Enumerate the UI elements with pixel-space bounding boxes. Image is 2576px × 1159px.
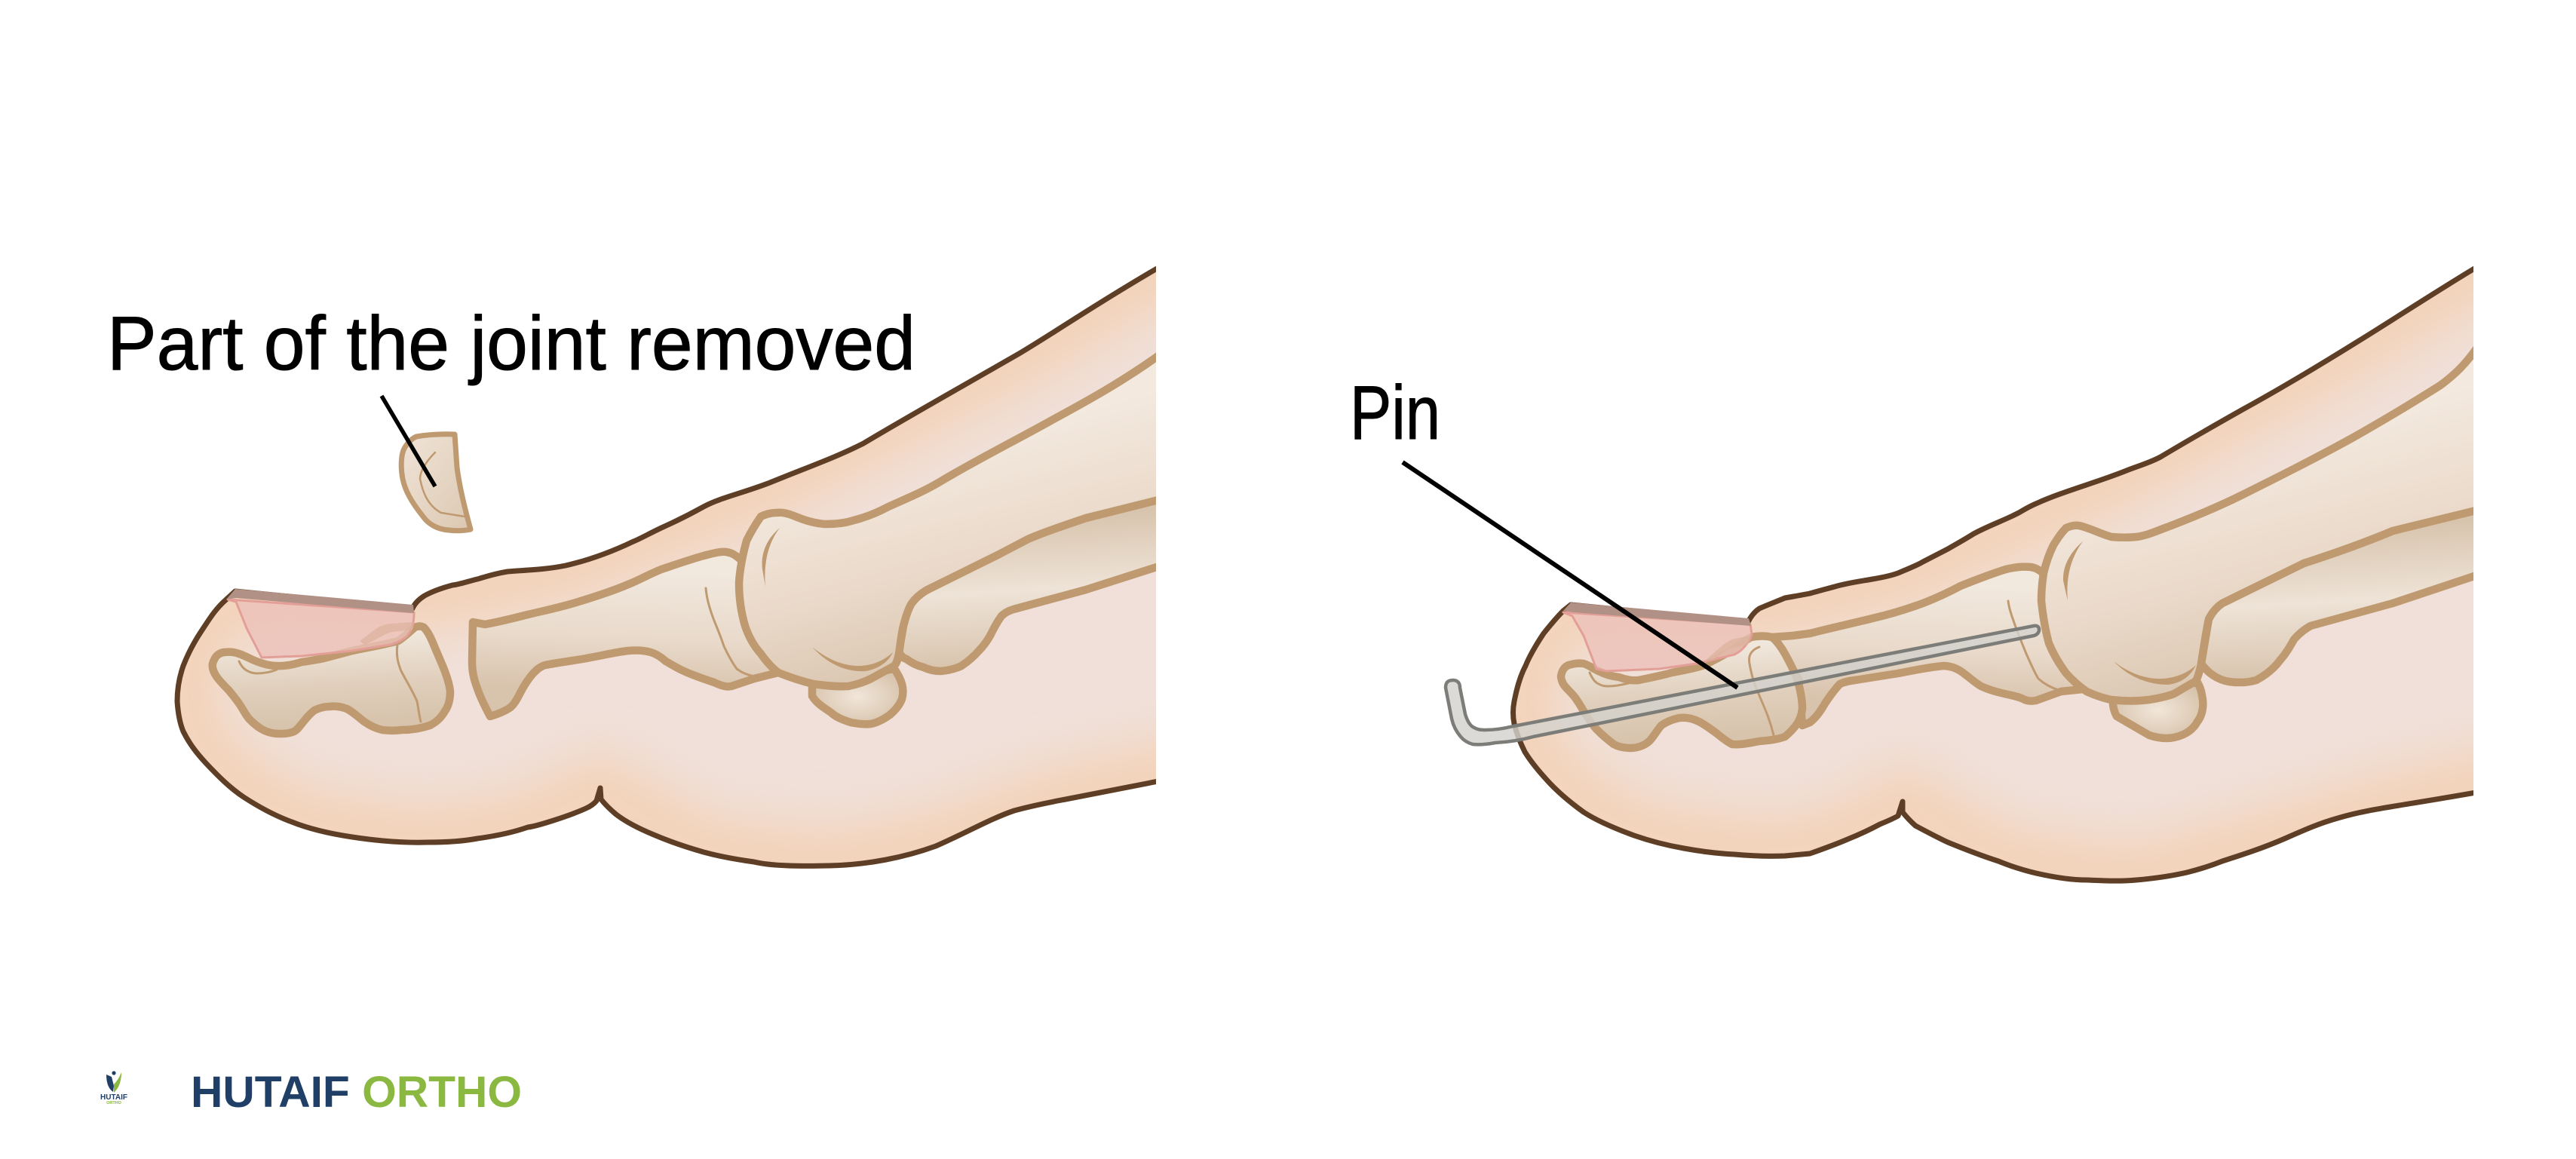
nail — [1563, 612, 1752, 671]
metatarsal head and shaft — [2041, 345, 2479, 701]
leader line: pin label — [1403, 462, 1737, 688]
distal phalanx details — [239, 645, 421, 722]
distal phalanx details — [1590, 647, 1774, 735]
brand name: Hutaif Ortho: HUTAIF ORTHO — [191, 1068, 522, 1117]
metatarsal head details — [2063, 541, 2196, 685]
sesamoid bone — [2113, 682, 2203, 738]
bone fragment: removed part of the joint — [401, 434, 471, 531]
sesamoid bone — [812, 669, 903, 724]
skin: left toe — [175, 265, 1156, 869]
lower metatarsal shaft — [2201, 510, 2479, 682]
logo icon: Hutaif Ortho mark: ORTHO — [106, 1101, 122, 1105]
logo icon: Hutaif Ortho mark: HUTAIF — [100, 1093, 127, 1102]
proximal phalanx — [1772, 567, 2096, 725]
illustration: right foot with pin — [1443, 265, 2473, 884]
nail inner fold — [1704, 636, 1750, 661]
surgical pin — [1446, 626, 2039, 744]
proximal phalanx joint line — [706, 588, 754, 676]
leader line: removed part label — [382, 396, 435, 486]
nail inner fold — [360, 622, 413, 645]
distal phalanx — [1561, 636, 1802, 748]
lower metatarsal shaft — [899, 499, 1161, 671]
nail — [228, 599, 414, 658]
proximal phalanx joint line — [2008, 601, 2059, 690]
heading: pin: Pin — [1350, 371, 1440, 455]
nail top band — [226, 589, 414, 613]
metatarsal head and shaft — [739, 354, 1161, 686]
logo icon: Hutaif Ortho mark — [100, 1071, 127, 1105]
distal phalanx — [213, 626, 450, 734]
proximal phalanx — [472, 552, 792, 716]
metatarsal head details — [762, 528, 893, 671]
skin: right toe — [1510, 265, 2473, 884]
illustration: left foot with part of the joint removed — [175, 265, 1156, 869]
nail top band — [1563, 602, 1751, 626]
heading: part of the joint removed: Part of the joint removed — [107, 302, 915, 386]
